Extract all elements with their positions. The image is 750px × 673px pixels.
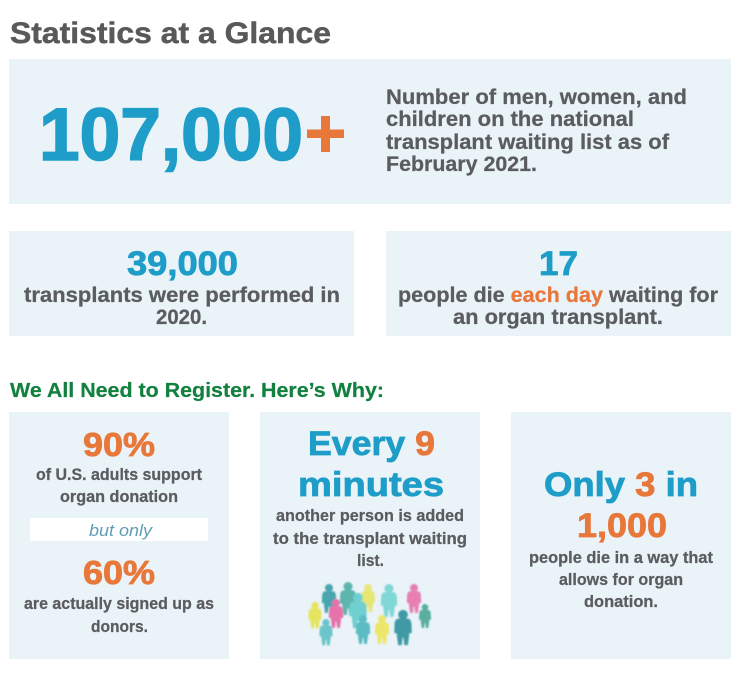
waiting list description: children on the national: [386, 108, 634, 131]
panel: daily deaths: [386, 231, 731, 336]
support description: of U.S. adults support: [36, 466, 202, 484]
transplants description: transplants were performed in: [24, 284, 340, 307]
stat: every 9 minutes: minutes: [298, 466, 444, 504]
panel: only 3 in 1,000: [511, 412, 731, 659]
signed up description: are actually signed up as: [24, 595, 214, 613]
stat: 39,000: 39,000: [127, 245, 238, 283]
but only callout: but only: [89, 521, 154, 540]
donation eligibility description: donation.: [584, 593, 658, 611]
waiting list description: transplant waiting list as of: [386, 131, 670, 154]
stat: only 3 in 1,000: 1,000: [577, 507, 667, 545]
waiting list growth description: another person is added: [276, 507, 464, 525]
transplants description: [24, 284, 340, 329]
stat: only 3 in 1,000: [544, 466, 698, 545]
panel: every 9 minutes: [260, 412, 480, 659]
stat: 17: 17: [539, 245, 578, 283]
waiting list description: February 2021.: [386, 153, 537, 176]
signed up description: [24, 595, 214, 636]
icon: crowd of people: [308, 582, 431, 645]
waiting list growth description: to the transplant waiting: [273, 530, 467, 548]
waiting list growth description: list.: [357, 552, 384, 570]
support description: organ donation: [60, 488, 178, 506]
big number: 107,000: [39, 93, 303, 176]
stat: only 3 in 1,000: Only 3 in: [544, 466, 698, 504]
section heading: We All Need to Register. Here’s Why:: [10, 380, 384, 402]
waiting list description: [386, 86, 687, 176]
donation eligibility description: people die in a way that: [529, 549, 713, 567]
panel: transplants performed: [9, 231, 354, 336]
but only callout: [30, 518, 208, 541]
stat: every 9 minutes: [298, 425, 444, 504]
stat: 60%: 60%: [83, 554, 155, 591]
signed up description: donors.: [91, 618, 148, 636]
panel: waiting list: [9, 59, 731, 204]
donation eligibility description: allows for organ: [559, 571, 683, 589]
waiting list growth description: [273, 507, 467, 570]
stat: every 9 minutes: Every 9: [308, 425, 435, 463]
title: Statistics at a Glance: [10, 17, 331, 50]
daily deaths description: people die each day waiting for: [398, 284, 718, 307]
panel: support vs signed up: [9, 412, 229, 659]
donation eligibility description: [529, 549, 713, 611]
transplants description: 2020.: [156, 306, 207, 329]
stat: 90%: 90%: [83, 426, 155, 463]
waiting list description: Number of men, women, and: [386, 86, 687, 109]
daily deaths description: an organ transplant.: [453, 306, 663, 329]
support description: [36, 466, 202, 506]
daily deaths description: [398, 284, 718, 329]
